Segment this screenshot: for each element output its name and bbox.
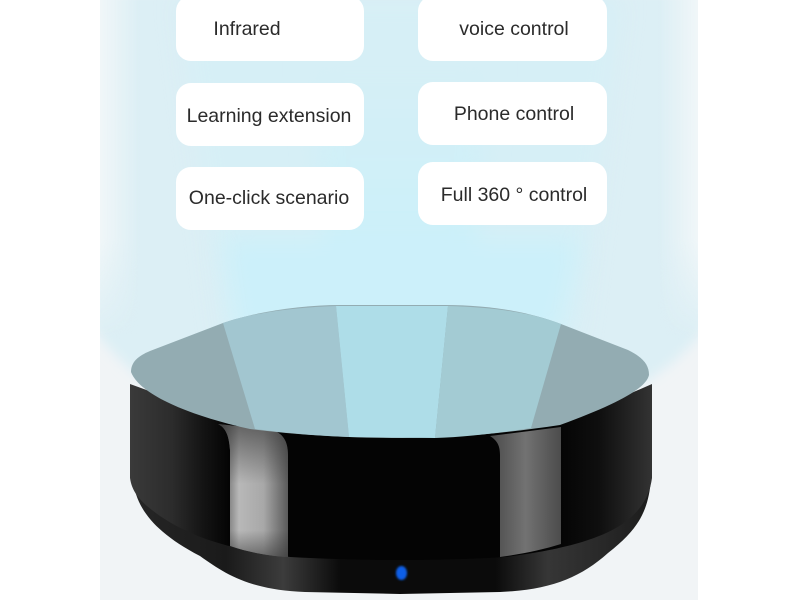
card: voice control (418, 0, 607, 61)
device lower base ring (133, 480, 651, 594)
light beam glow (90, 0, 708, 385)
illustration: background glow and smart remote device (100, 0, 698, 600)
device (130, 305, 652, 594)
beam on glass: right (435, 306, 561, 438)
card: Infrared: Infrared (213, 18, 281, 40)
card: One-click scenario: One-click scenario (189, 187, 349, 209)
card: Full 360 control: Full 360 ° control (441, 184, 587, 206)
device glossy body (130, 384, 652, 560)
glass top surface (131, 305, 649, 438)
blue LED indicator (396, 566, 407, 580)
card: Infrared (176, 0, 364, 61)
card: One-click scenario (176, 167, 364, 230)
right reflection (490, 427, 561, 557)
card: Phone control: Phone control (454, 103, 574, 125)
beam on glass: centre (336, 306, 448, 438)
left reflection (218, 424, 288, 557)
beam on glass: left (223, 306, 349, 437)
card: Full 360 control (418, 162, 607, 225)
background panel (100, 0, 698, 600)
card: Phone control (418, 82, 607, 145)
card: Learning extension (176, 83, 364, 146)
card: voice control: voice control (459, 18, 569, 40)
card: Learning extension: Learning extension (187, 105, 351, 127)
